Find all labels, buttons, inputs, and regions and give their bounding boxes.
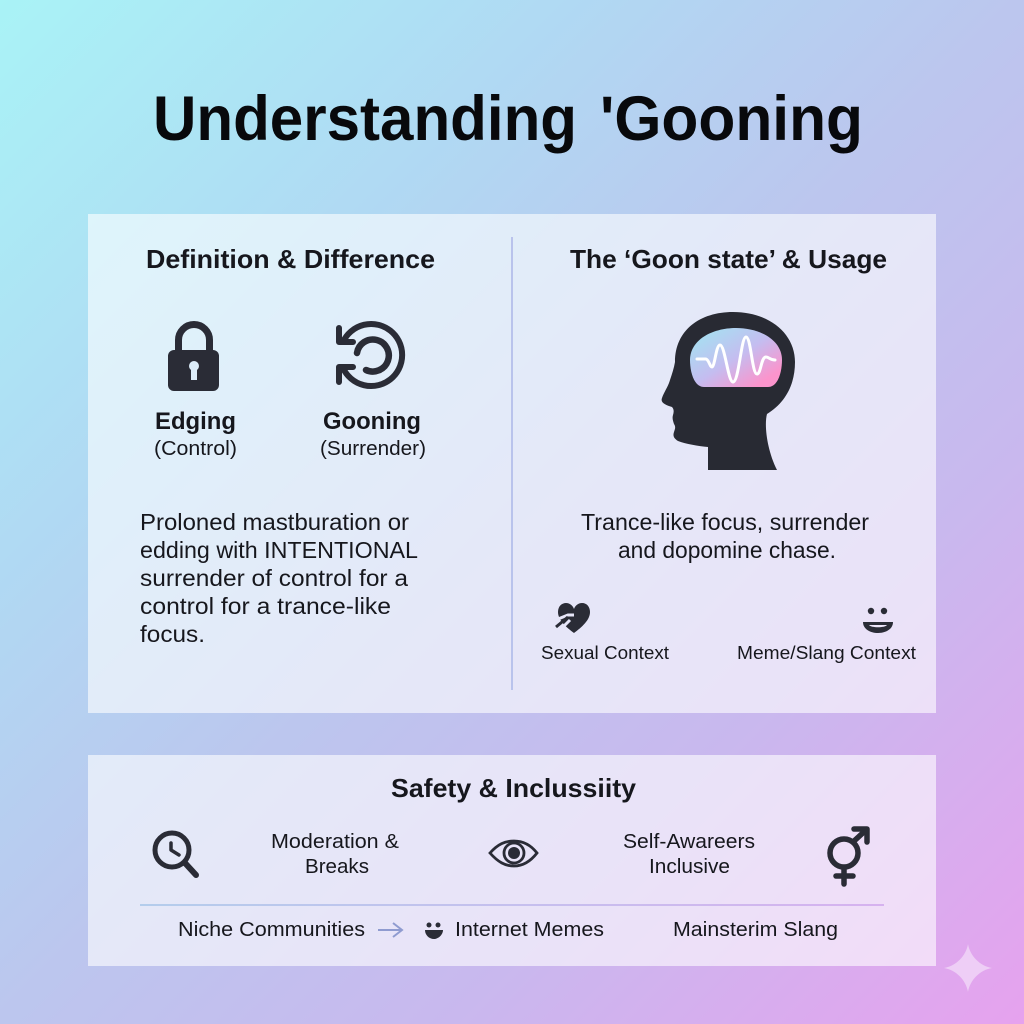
icon: looping arrows <box>339 324 402 386</box>
text: internet memes: Internet Memes <box>455 919 604 941</box>
text block: definition: surrender of control for a <box>140 565 408 591</box>
heading: definition and difference: Definition & Difference <box>146 244 435 274</box>
text block: goon state: and dopomine chase. <box>618 537 836 563</box>
title: Understanding <box>153 84 577 154</box>
icon: magnifier with clock <box>155 833 196 875</box>
icon: sparkle <box>944 944 992 992</box>
label: edging <box>154 408 237 460</box>
arrow <box>378 923 402 937</box>
text: moderation and breaks: Moderation & <box>271 831 400 853</box>
text: niche communities: Niche Communities <box>178 919 365 941</box>
icon: head with brainwave <box>662 312 795 470</box>
text: moderation and breaks: Breaks <box>305 856 369 878</box>
text block: definition <box>140 509 418 647</box>
panel: definition and goon state <box>88 214 936 713</box>
label: gooning: Gooning <box>323 408 421 435</box>
icon: gender symbol <box>830 829 867 884</box>
label: gooning: (Surrender) <box>320 438 426 460</box>
icon: smile <box>863 608 893 633</box>
text: mainstream slang: Mainsterim Slang <box>673 919 838 941</box>
label: meme slang context: Meme/Slang Context <box>737 643 916 663</box>
text block: definition: control for a trance-like <box>140 593 391 619</box>
text block: definition: Proloned mastburation or <box>140 509 409 535</box>
label: edging: (Control) <box>154 438 237 460</box>
icon: small smile <box>425 922 443 939</box>
panel: safety and inclusivity <box>88 755 936 966</box>
icon: heart with arrow <box>556 603 590 633</box>
text: self-awareness and inclusive: Self-Awareers <box>623 831 755 853</box>
text: moderation and breaks <box>271 831 400 878</box>
title <box>153 84 863 154</box>
label: gooning <box>320 408 426 460</box>
icon: eye <box>490 841 537 866</box>
label: sexual context: Sexual Context <box>541 643 669 663</box>
text block: definition: focus. <box>140 621 205 647</box>
text block: goon state <box>581 509 869 563</box>
text: self-awareness and inclusive: Inclusive <box>649 856 730 878</box>
text block: definition: edding with INTENTIONAL <box>140 537 418 563</box>
title: 'Gooning <box>600 84 863 154</box>
label: edging: Edging <box>155 408 236 435</box>
heading: goon state and usage: The ‘Goon state’ & Usage <box>570 244 887 274</box>
icon: padlock <box>168 324 219 391</box>
text: self-awareness and inclusive <box>623 831 755 878</box>
text block: goon state: Trance-like focus, surrender <box>581 509 869 535</box>
heading: safety: Safety & Inclussiity <box>391 773 637 803</box>
